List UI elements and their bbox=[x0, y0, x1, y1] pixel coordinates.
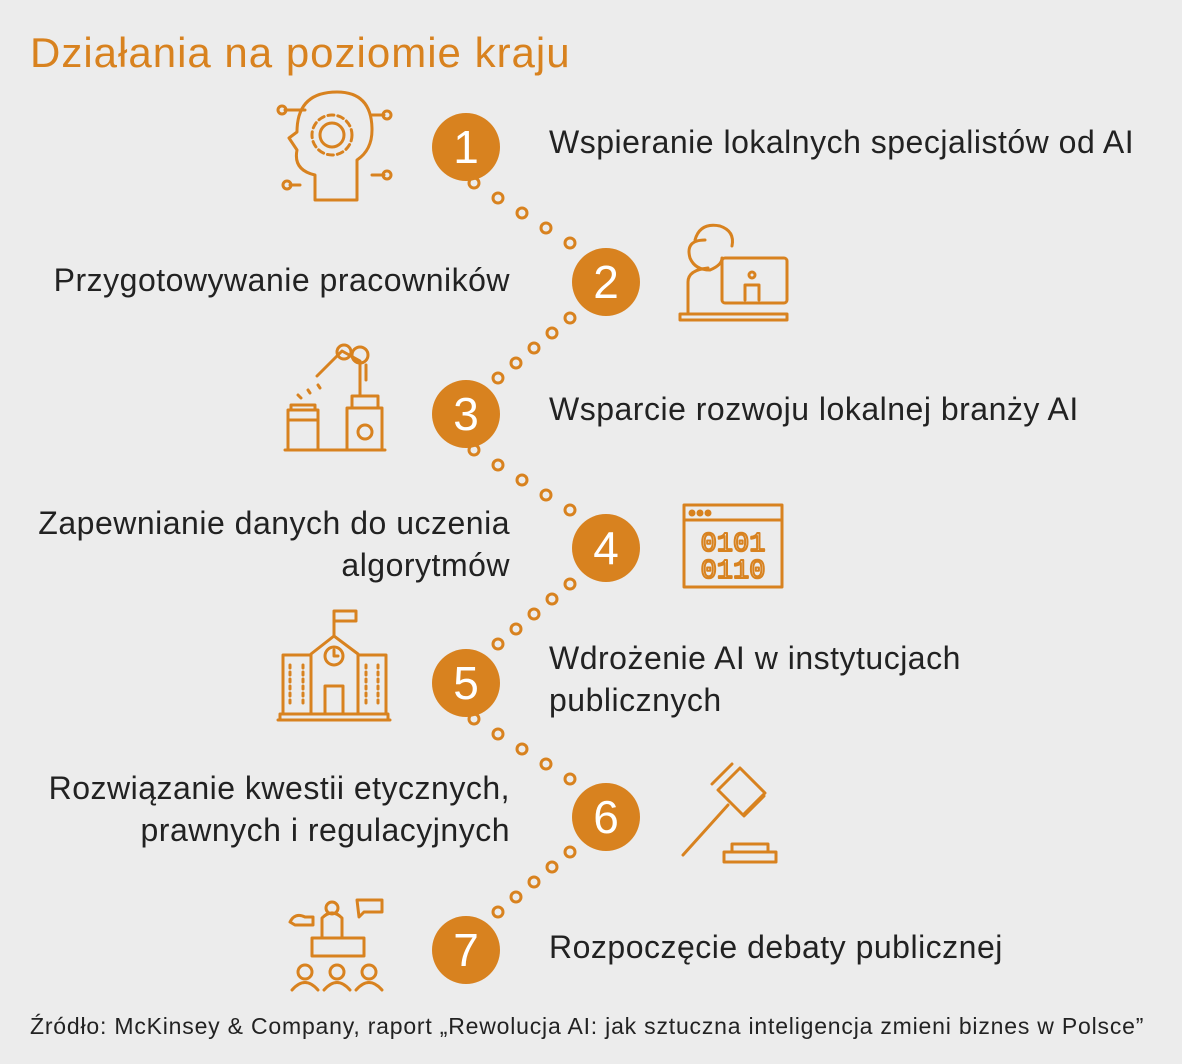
number 1 bbox=[432, 113, 500, 181]
number 4 bbox=[572, 514, 640, 582]
title: Działania na poziomie kraju bbox=[30, 29, 571, 76]
text 4: Zapewnianie danych do uczenia bbox=[38, 505, 510, 541]
source note: Źródło: McKinsey & Company, raport „Rewolucja AI: jak sztuczna inteligencja zmieni biznes w Polsce” bbox=[30, 1013, 1144, 1039]
icon: public building bbox=[278, 611, 390, 720]
icon: binary window: 0101 bbox=[701, 530, 765, 560]
text 6: Rozwiązanie kwestii etycznych, bbox=[49, 770, 510, 806]
number 7 bbox=[432, 916, 500, 984]
text 4: algorytmów bbox=[341, 547, 510, 583]
icon: binary window: 0110 bbox=[701, 557, 765, 587]
icon: binary window bbox=[684, 505, 782, 587]
connector 6-7 bbox=[493, 847, 575, 917]
text 7: Rozpoczęcie debaty publicznej bbox=[549, 929, 1003, 965]
text 2: Przygotowywanie pracowników bbox=[54, 262, 510, 298]
text 6 bbox=[49, 770, 510, 848]
text 1: Wspieranie lokalnych specjalistów od AI bbox=[549, 124, 1134, 160]
number 5: 5 bbox=[453, 657, 479, 709]
number 3 bbox=[432, 380, 500, 448]
number 3: 3 bbox=[453, 388, 479, 440]
text 3: Wsparcie rozwoju lokalnej branży AI bbox=[549, 391, 1079, 427]
text 5: Wdrożenie AI w instytucjach bbox=[549, 640, 961, 676]
number 2: 2 bbox=[593, 256, 619, 308]
icon: public debate bbox=[290, 900, 382, 990]
text 6: prawnych i regulacyjnych bbox=[140, 812, 510, 848]
text 4 bbox=[38, 505, 510, 583]
number 5 bbox=[432, 649, 500, 717]
connector 4-5 bbox=[493, 579, 575, 649]
icon: AI head bbox=[278, 92, 391, 200]
icon: robot arm bbox=[285, 345, 385, 450]
number 7: 7 bbox=[453, 924, 479, 976]
icon: worker at computer bbox=[680, 225, 787, 320]
connector 1-2 bbox=[469, 178, 575, 248]
number 2 bbox=[572, 248, 640, 316]
connector 3-4 bbox=[469, 445, 575, 515]
connector 2-3 bbox=[493, 313, 575, 383]
text 5 bbox=[549, 640, 961, 718]
connector 5-6 bbox=[469, 714, 575, 784]
number 4: 4 bbox=[593, 522, 619, 574]
number 6 bbox=[572, 783, 640, 851]
number 1: 1 bbox=[453, 121, 479, 173]
number 6: 6 bbox=[593, 791, 619, 843]
icon: gavel bbox=[683, 764, 776, 862]
text 5: publicznych bbox=[549, 682, 722, 718]
